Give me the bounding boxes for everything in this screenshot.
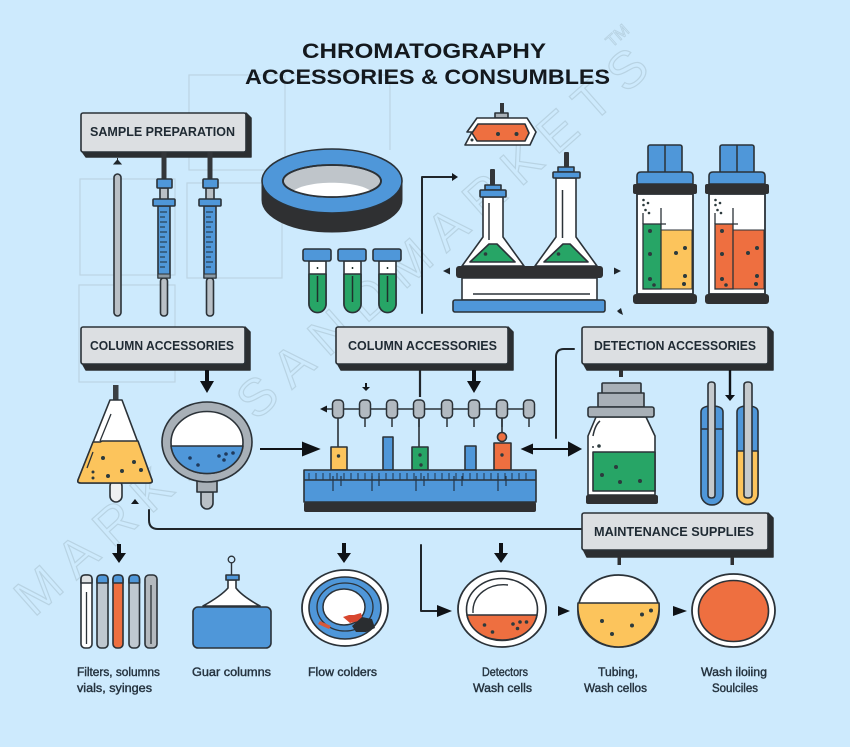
icon: flow coil (302, 570, 388, 646)
line: detection label elbow (556, 349, 574, 438)
title (245, 39, 610, 89)
caption: tubing (584, 667, 647, 695)
arrow: detection label to tubes (725, 370, 735, 401)
caption: detectors: Detectors (482, 665, 528, 679)
arrow: small down arrow above manifold (362, 383, 370, 391)
icon: left bottle (633, 145, 697, 304)
icon: tubing cell (578, 575, 659, 647)
caption: detectors: Wash cells (473, 683, 532, 695)
icon: filter tube set (81, 575, 157, 648)
caption: detectors (473, 665, 532, 695)
arrow: tubing to wash (673, 606, 687, 616)
icon: blue ring (262, 149, 402, 232)
panel: sample preparation label: SAMPLE PREPARATION (90, 125, 235, 139)
caption: wash: Wash iloiing (701, 667, 767, 679)
text: TM (602, 21, 633, 51)
line: return line to maintenance (131, 499, 582, 529)
arrow: to filter tubes (112, 544, 126, 563)
text: MARKETSANDMARKETS (4, 37, 660, 627)
arrow: column label to manifold right (467, 370, 481, 393)
caption: filters: Filters, solumns (77, 667, 160, 679)
icon: blue probe tube (701, 382, 723, 505)
title: ACCESSORIES & CONSUMBLES (245, 65, 610, 89)
line: column label to manifold (419, 370, 421, 397)
arrow: to flow coil (337, 543, 351, 563)
icon: glass rod (114, 158, 121, 316)
panel: sample preparation label (81, 113, 251, 157)
caption: flow colders: Flow colders (308, 667, 377, 679)
panel: column accessories label center: COLUMN ACCESSORIES (348, 339, 497, 353)
panel: detection accessories label (582, 327, 773, 370)
arrow: gauge to manifold (260, 443, 318, 455)
caption: wash (701, 667, 767, 695)
icon: green reagent jar (586, 370, 658, 504)
panel: detection accessories label: DETECTION ACCESSORIES (594, 339, 756, 353)
arrow: double arrow manifold to jar (523, 443, 580, 455)
arrow: to flasks (422, 173, 458, 313)
arrow: column label to gauge (200, 370, 214, 393)
icon: detector cell (458, 571, 546, 647)
arrow: to detector cell (494, 543, 508, 563)
icon: wash cell (692, 574, 775, 647)
caption: filters: vials, syinges (77, 683, 152, 695)
panel: column accessories label left (81, 327, 250, 370)
icon: column manifold and ruler (304, 400, 536, 512)
icon: top filter holder (465, 103, 536, 145)
icon: yellow probe tube (737, 382, 758, 504)
icon: conical flask (78, 385, 152, 502)
caption: tubing: Tubing, (598, 667, 638, 679)
icon: green test tubes (303, 249, 401, 312)
icon: syringe 2 (199, 152, 221, 316)
caption: guard columns: Guar columns (192, 667, 271, 679)
arrow: detector to tubing (558, 606, 570, 616)
panel: maintenance supplies label (582, 513, 773, 565)
icon: right bottle (705, 145, 769, 304)
title: CHROMATOGRAPHY (302, 39, 546, 63)
arrow: maintenance elbow to detector cell (421, 545, 452, 617)
panel: maintenance supplies label: MAINTENANCE SUPPLIES (594, 525, 754, 539)
panel: column accessories label center (336, 327, 513, 370)
caption: tubing: Wash cellos (584, 683, 647, 695)
caption: wash: Soulciles (712, 683, 758, 695)
panel: column accessories label left: COLUMN ACCESSORIES (90, 339, 234, 353)
icon: syringe 1 (153, 152, 175, 316)
icon: guard column (193, 556, 271, 648)
icon: pressure gauge (162, 402, 252, 509)
caption: filters (77, 667, 160, 695)
icon: flask station (443, 152, 623, 315)
